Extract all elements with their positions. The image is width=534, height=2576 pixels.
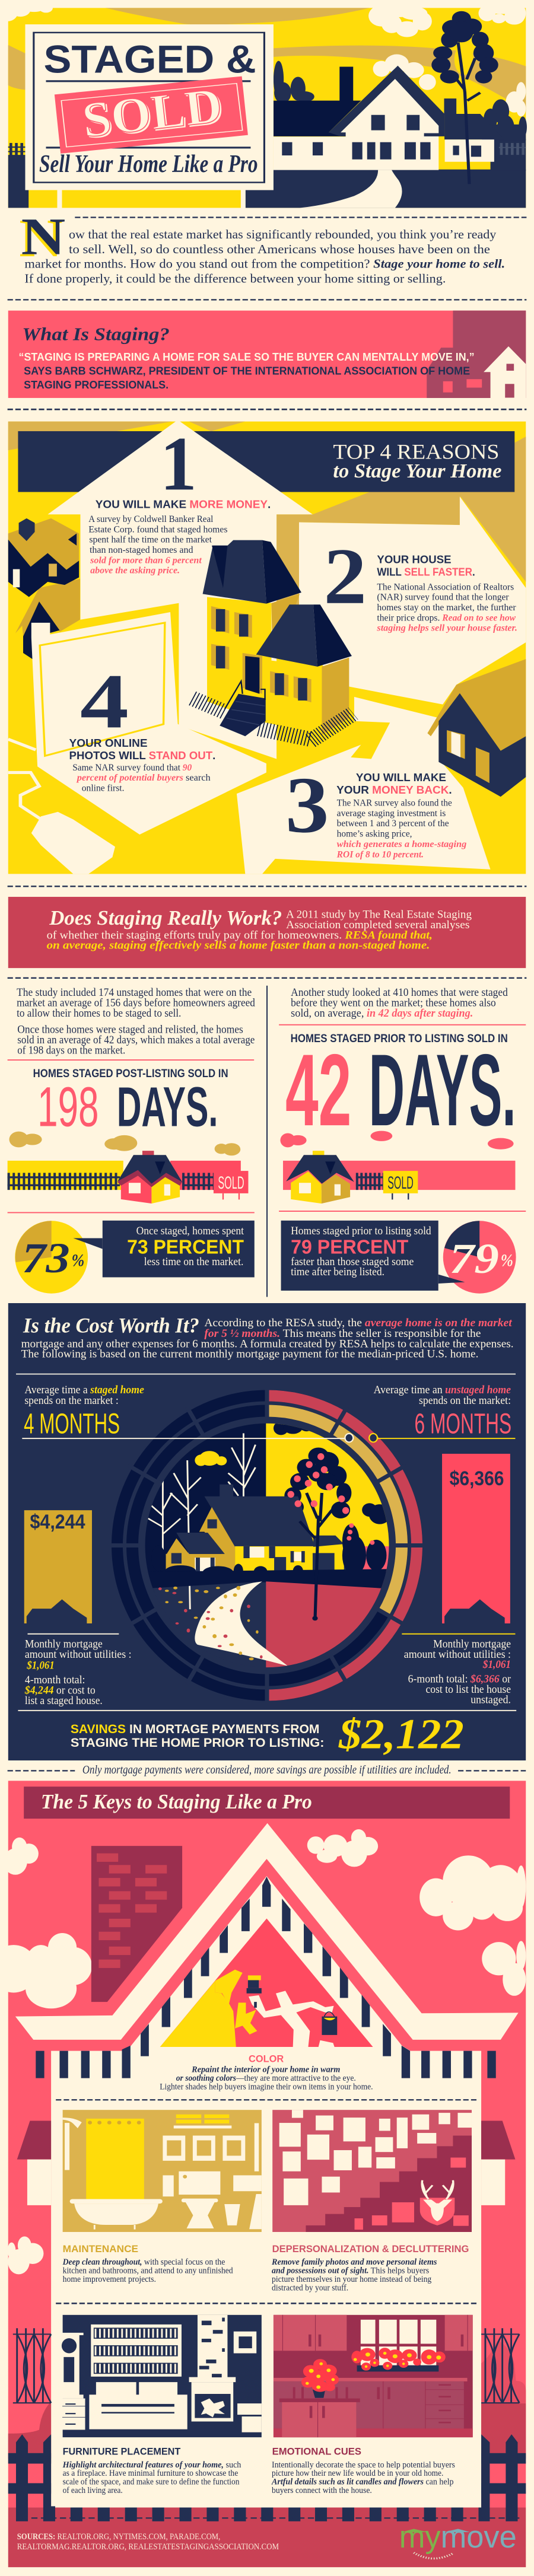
section title	[333, 440, 502, 482]
heading: Is the Cost Worth It?	[23, 1313, 199, 1338]
staged time label: 4 MONTHS	[24, 1408, 120, 1440]
reason 3 text: which generates a home-staging	[337, 839, 466, 849]
intro copy: for 5 ½ months. This means the seller is responsible for the	[204, 1328, 481, 1339]
key text: furniture: as a fireplace. Have minimal furniture to showcase the	[63, 2469, 238, 2478]
depersonalization illustration: wall	[272, 2110, 472, 2232]
staged breakdown: 4-month total:	[25, 1674, 85, 1686]
intro copy: A 2011 study by The Real Estate Staging	[286, 909, 472, 921]
bathroom fixtures	[70, 2194, 262, 2230]
key text: depersonalization: Remove family photos and move personal items	[271, 2257, 437, 2267]
pie chart: 79 percent: %	[501, 1251, 513, 1271]
stamp word: sold: SOLD	[80, 78, 225, 148]
right column text: sold, on average, in 42 days after staging.	[291, 1007, 473, 1019]
left column text: to allow their homes to be staged to sell.	[17, 1007, 181, 1019]
kitchen illustration	[274, 2315, 473, 2437]
cost section contents	[16, 1313, 516, 1758]
reason 4 text: Same NAR survey found that 90	[72, 762, 192, 773]
intro text	[24, 228, 505, 286]
stamp	[55, 77, 248, 154]
key text: depersonalization	[271, 2244, 469, 2292]
reason 3 text: YOU WILL MAKE	[356, 772, 446, 784]
reason 1 text: above the asking price.	[90, 565, 180, 575]
title: staged: STAGED &	[43, 37, 256, 81]
drop cap: N	[19, 208, 63, 268]
staged breakdown: Monthly mortgage	[25, 1638, 103, 1650]
key text: depersonalization: and possessions out of sight. This helps buyers	[272, 2266, 430, 2275]
reason 1 text: than non-staged homes and	[90, 545, 193, 555]
savings: STAGING THE HOME PRIOR TO LISTING:	[71, 1736, 324, 1750]
callout: 79 percent	[281, 1221, 465, 1291]
reason 2 text: (NAR) survey found that the longer	[377, 592, 509, 602]
heading: What Is Staging?	[22, 324, 170, 345]
panel: what is staging	[8, 311, 526, 398]
reason 2 text: their price drops. Read on to see how	[377, 612, 516, 623]
bar: unstaged cost: $6,366	[450, 1467, 504, 1490]
right small house	[427, 659, 526, 797]
rafters	[36, 1877, 496, 2078]
callout: 79 percent: faster than those staged some	[291, 1256, 414, 1268]
reason 3 text: YOUR MONEY BACK.	[336, 784, 452, 797]
reason 2 text: staging helps sell your house faster.	[376, 623, 517, 633]
stat: 42 days	[285, 1033, 516, 1147]
pie chart: 73 percent: 73	[22, 1234, 70, 1282]
bar: unstaged cost	[442, 1454, 510, 1625]
sources: SOURCES: REALTOR.ORG, NYTIMES.COM, PARADE.COM,	[17, 2532, 220, 2541]
quote: STAGING PROFESSIONALS.	[24, 378, 169, 391]
stamp word: sold: SOLD	[81, 79, 227, 150]
reason numbers	[80, 421, 367, 850]
reason 1 text: YOU WILL MAKE MORE MONEY.	[96, 499, 271, 511]
left houses	[8, 518, 80, 659]
reason numbers: 2	[323, 532, 367, 621]
intro text: market for months. How do you stand out from the competition? Stage your home to sell.	[24, 257, 505, 271]
left column text: of 198 days on the market.	[17, 1045, 125, 1056]
key text: furniture	[62, 2446, 241, 2495]
pie chart: 73 percent: %	[72, 1251, 84, 1271]
bare trees	[148, 1434, 255, 1609]
reason 3 text: The NAR survey also found the	[337, 797, 452, 808]
unstaged breakdown: amount without utilities :	[404, 1648, 511, 1660]
key text: emotional cues	[271, 2446, 455, 2495]
reason 3 text: between 1 and 3 percent of the	[337, 818, 449, 829]
clouds	[0, 1829, 526, 2008]
reason 2 text: The National Association of Realtors	[377, 581, 514, 592]
key text: maintenance: MAINTENANCE	[63, 2244, 138, 2255]
right column text	[291, 987, 508, 1019]
chimney	[91, 1846, 182, 2002]
unstaged breakdown: unstaged.	[471, 1694, 511, 1706]
key text: furniture: Highlight architectural features of your home, such	[62, 2460, 241, 2469]
reason 1 text: sold for more than 6 percent	[90, 555, 202, 565]
heading: Does Staging Really Work?	[49, 907, 282, 929]
savings	[71, 1711, 464, 1758]
scene: right house and sold sign	[280, 1131, 515, 1203]
blossoms	[287, 1453, 374, 1545]
heading banner: The 5 Keys to Staging Like a Pro	[41, 1790, 312, 1813]
stat: 198 days: DAYS.	[117, 1075, 218, 1138]
reason 4 text: percent of potential buyers search	[76, 772, 211, 783]
subtitle: Sell Your Home Like a Pro	[39, 149, 258, 178]
sign board	[25, 24, 274, 209]
reason 1 text	[88, 499, 271, 575]
dial scene	[143, 1421, 392, 1670]
intro copy: According to the RESA study, the average home is on the market	[204, 1317, 513, 1329]
reason 2 text: YOUR HOUSE	[377, 553, 452, 566]
reason numbers: 1	[160, 421, 197, 507]
heading banner	[24, 1787, 510, 1819]
reason 4 text: PHOTOS WILL STAND OUT.	[69, 750, 215, 762]
panel: top 4 reasons	[8, 409, 526, 874]
reason numbers: 3	[285, 761, 329, 850]
color key text: Repaint the interior of your home in warm	[191, 2064, 340, 2074]
reason 2 text: homes stay on the market, the further	[377, 602, 516, 613]
arrow shapes	[31, 420, 526, 874]
unstaged time label: spends on the market:	[419, 1394, 511, 1406]
key text: depersonalization: distracted by your stuff.	[272, 2283, 348, 2292]
staged time label	[24, 1384, 144, 1440]
key text: emotional cues: EMOTIONAL CUES	[272, 2446, 361, 2457]
staged breakdown	[24, 1638, 132, 1706]
key text: furniture: FURNITURE PLACEMENT	[63, 2446, 181, 2457]
callout: 73 percent: less time on the market.	[144, 1256, 243, 1268]
unstaged time label	[374, 1384, 511, 1440]
tree	[431, 11, 498, 184]
sources: REALTORMAG.REALTOR.ORG, REALESTATESTAGINGASSOCIATION.COM	[17, 2542, 279, 2551]
reason 3 text	[336, 772, 466, 859]
left column text: market an average of 156 days before homeowners agreed	[17, 997, 256, 1009]
quote	[19, 351, 475, 391]
callout: 73 percent	[73, 1221, 255, 1277]
unstaged breakdown: cost to list the house	[426, 1684, 511, 1696]
staged breakdown: amount without utilities :	[25, 1648, 132, 1660]
sources	[17, 2532, 279, 2551]
unstaged time label: Average time an unstaged home	[374, 1384, 511, 1396]
pie chart: 79 percent: 79	[450, 1235, 499, 1282]
color key text: Lighter shades help buyers imagine their own items in your home.	[160, 2081, 373, 2091]
maintenance illustration: bathroom	[63, 2110, 262, 2232]
staged breakdown: list a staged house.	[25, 1695, 103, 1706]
callout: 73 percent: Once staged, homes spent	[136, 1225, 244, 1237]
dial rings	[107, 1385, 427, 1706]
staged time label: Average time a staged home	[24, 1384, 144, 1396]
callout: 79 percent: time after being listed.	[291, 1266, 384, 1278]
scene: left house and sold sign: SOLD	[218, 1173, 244, 1193]
reason 4 text: YOUR ONLINE	[69, 737, 148, 750]
unstaged breakdown	[404, 1638, 511, 1706]
key text: emotional cues: Artful details such as lit candles and flowers can help	[271, 2477, 454, 2486]
roof	[15, 1823, 519, 2040]
savings: SAVINGS IN MORTAGE PAYMENTS FROM	[71, 1722, 319, 1736]
panel background: cost worth it	[8, 1303, 526, 1760]
callout: 79 percent: 79 PERCENT	[291, 1236, 408, 1258]
icon: houses	[427, 311, 526, 398]
ground and fences	[8, 61, 527, 208]
intro copy	[21, 1317, 514, 1360]
key text: depersonalization: picture themselves in your home instead of being	[272, 2274, 432, 2284]
key text: emotional cues: Intentionally decorate the space to help potential buyers	[272, 2460, 455, 2469]
callout: 79 percent: Homes staged prior to listing sold	[291, 1225, 431, 1237]
section title: to Stage Your Home	[333, 460, 502, 482]
key text: furniture: of each living area.	[63, 2485, 123, 2495]
stat: 198 days: 198	[37, 1075, 98, 1138]
savings: $2,122	[338, 1711, 464, 1758]
reason 3 text: average staging investment is	[337, 808, 446, 819]
key text: maintenance	[62, 2244, 233, 2284]
deer trophy and frames	[355, 2180, 469, 2230]
staged time label: spends on the market :	[24, 1394, 119, 1406]
drop cap: N	[21, 208, 65, 266]
reason 3 text: home’s asking price,	[337, 829, 412, 839]
house	[166, 1485, 344, 1575]
intro copy: on average, staging effectively sells a home faster than a non-staged home.	[47, 940, 430, 951]
intro copy	[47, 909, 472, 951]
side lattices	[13, 2328, 519, 2403]
stat: 42 days: 42	[285, 1033, 351, 1147]
intro block	[8, 208, 526, 398]
flowers	[301, 2348, 446, 2392]
central house	[192, 540, 353, 741]
key text: maintenance: home improvement projects.	[63, 2274, 156, 2284]
color key text: COLOR	[249, 2053, 284, 2065]
intro copy: of whether their staging efforts truly pay off for homeowners. RESA found that,	[47, 929, 433, 941]
clouds	[0, 0, 526, 116]
intro text: If done properly, it could be the difference between your home sitting or selling.	[24, 272, 446, 286]
reason 4 text	[69, 737, 215, 793]
navy title banner	[18, 431, 514, 492]
furniture illustration	[62, 2315, 262, 2437]
key text: maintenance: kitchen and bathrooms, and attend to any unfinished	[63, 2266, 233, 2275]
key text: emotional cues: picture how their new life would be in your old home.	[272, 2469, 443, 2478]
key text: maintenance: Deep clean throughout, with special focus on the	[62, 2257, 225, 2267]
bar: staged cost	[24, 1510, 92, 1625]
house body	[51, 1876, 481, 2508]
unstaged breakdown: 6-month total: $6,366 or	[408, 1673, 511, 1685]
stat: 198 days: HOMES STAGED POST-LISTING SOLD IN	[33, 1067, 228, 1080]
hero illustration panel	[0, 0, 527, 209]
callout: 73 percent: 73 PERCENT	[127, 1236, 244, 1258]
side bushes	[8, 2341, 526, 2459]
lower house section	[8, 2180, 526, 2567]
leaves	[165, 1586, 259, 1660]
side wings	[17, 2120, 515, 2205]
reason 2 text: WILL SELL FASTER.	[377, 566, 475, 578]
color key text	[160, 2053, 373, 2091]
reason 1 text: Estate Corp. found that staged homes	[88, 524, 227, 534]
reason 1 text: spent half the time on the market	[89, 534, 212, 545]
scene: left house and sold sign	[8, 1132, 248, 1203]
left column text: The study included 174 unstaged homes that were on the	[17, 987, 252, 998]
bushes and ground	[143, 1524, 392, 1590]
section title: TOP 4 REASONS	[333, 440, 499, 464]
mouse	[31, 812, 115, 874]
reason 4 text: online first.	[82, 782, 125, 793]
pie chart: 79 percent	[443, 1221, 516, 1294]
staged breakdown: $4,244 or cost to	[24, 1685, 96, 1696]
stat: 198 days	[33, 1067, 228, 1138]
reason numbers: 4	[80, 658, 129, 745]
intro copy: Association completed several analyses	[286, 919, 470, 931]
left column text: sold in an average of 42 days, which makes a total average	[17, 1034, 255, 1046]
house	[274, 66, 504, 208]
pie chart: 73 percent	[15, 1221, 88, 1294]
staged breakdown: $1,061	[27, 1660, 55, 1671]
unstaged breakdown: Monthly mortgage	[433, 1638, 511, 1650]
blossoming tree	[284, 1447, 351, 1518]
painter illustration	[160, 1918, 373, 2047]
clouds	[274, 1421, 390, 1524]
panel: the 5 keys	[0, 1763, 526, 2508]
left cloud	[8, 2236, 43, 2274]
crimson ground	[8, 2508, 526, 2567]
color key text: or soothing colors—they are more attractive to the eye.	[176, 2073, 356, 2083]
bar: staged cost: $4,244	[30, 1511, 85, 1533]
key text: furniture: scale of the space, and make sure to define the function	[63, 2477, 240, 2486]
reason 3 text: ROI of 8 to 10 percent.	[336, 849, 424, 859]
scene: right house and sold sign: SOLD	[387, 1173, 414, 1193]
panel: does staging really work	[8, 886, 526, 1297]
picket fence	[8, 2434, 526, 2521]
key text: emotional cues: buyers connect with the house.	[272, 2485, 372, 2495]
reason 1 text: A survey by Coldwell Banker Real	[88, 514, 214, 524]
left column text	[17, 987, 256, 1056]
reason 2 text	[376, 553, 517, 633]
unstaged breakdown: $1,061	[482, 1659, 511, 1671]
left column text: Once those homes were staged and relisted, the homes	[17, 1024, 243, 1036]
